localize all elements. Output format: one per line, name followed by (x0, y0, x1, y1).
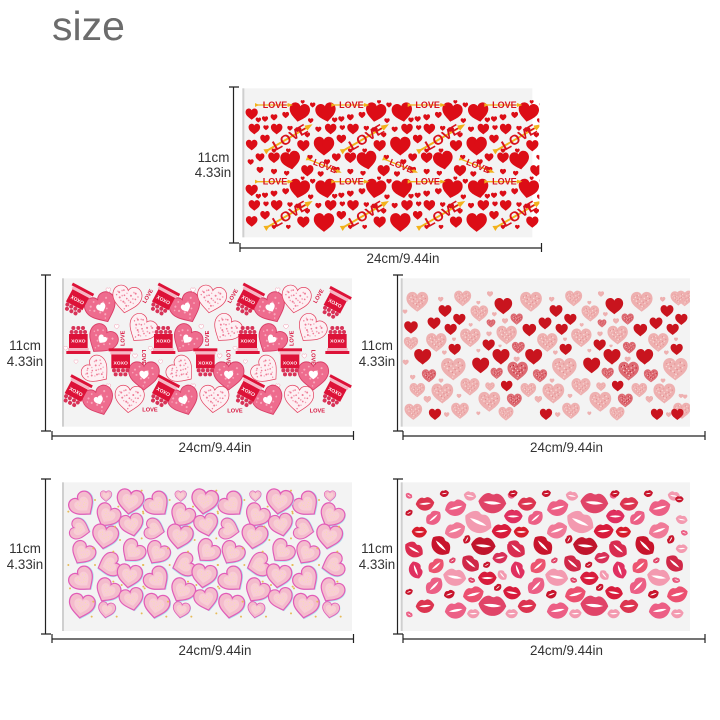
pattern sheet: LOVE (227, 409, 243, 415)
width dimension: 24cm/9.44in (179, 440, 251, 455)
height dimension (7, 479, 51, 634)
title: size (52, 3, 125, 49)
pattern sheet: LOVE (309, 350, 315, 365)
width dimension (52, 431, 354, 455)
pattern sheet: XOXO (155, 295, 171, 307)
pattern sheet: XOXO (330, 338, 345, 344)
height dimension: 4.33in (195, 165, 231, 180)
pattern sheet: LOVE (140, 350, 146, 365)
pattern sheet: XOXO (69, 295, 85, 307)
width dimension: 24cm/9.44in (530, 440, 603, 455)
pattern sheet: LOVE (205, 330, 211, 346)
pattern sheet: LOVE (269, 197, 310, 230)
pattern sheet: LOVE (313, 288, 326, 305)
pattern sheet: LOVE (465, 157, 491, 175)
pattern sheet: LOVE (492, 100, 517, 110)
panel: red hearts with LOVE (195, 87, 567, 266)
height dimension: 4.33in (359, 354, 395, 369)
pattern sheet: LOVE (388, 157, 415, 175)
pattern sheet: LOVE (422, 121, 463, 153)
height dimension (7, 275, 51, 431)
pattern sheet: XOXO (113, 360, 128, 366)
width dimension (403, 634, 705, 658)
height dimension (359, 479, 403, 634)
pattern sheet (401, 278, 693, 427)
pattern sheet: LOVE (269, 121, 310, 153)
height dimension: 4.33in (7, 557, 43, 572)
pattern sheet (62, 482, 352, 631)
height dimension: 11cm (9, 541, 41, 556)
width dimension: 24cm/9.44in (179, 643, 251, 658)
pattern sheet: LOVE (492, 177, 517, 187)
panel: donut hearts and XOXO jars (7, 275, 354, 455)
pattern sheet: LOVE (312, 157, 338, 175)
width dimension (403, 431, 705, 455)
width dimension (52, 634, 354, 658)
pattern sheet: LOVE (339, 177, 364, 187)
height dimension (359, 275, 403, 431)
height dimension (195, 87, 239, 243)
pattern sheet: LOVE (415, 177, 440, 187)
pattern sheet: XOXO (240, 338, 255, 344)
pattern sheet: LOVE (120, 330, 126, 346)
pattern sheet: XOXO (327, 386, 343, 398)
pattern sheet: XOXO (155, 386, 171, 398)
width dimension (240, 243, 542, 266)
pattern sheet (59, 278, 352, 427)
height dimension: 11cm (198, 150, 229, 165)
pattern sheet: LOVE (263, 177, 287, 187)
pattern sheet: XOXO (240, 295, 256, 307)
panel: lipstick kisses (359, 479, 705, 658)
height dimension: 11cm (361, 541, 393, 556)
pattern sheet: LOVE (225, 350, 231, 365)
width dimension: 24cm/9.44in (367, 251, 439, 266)
pattern sheet: LOVE (415, 100, 440, 110)
pattern sheet: XOXO (198, 360, 213, 366)
pattern sheet: LOVE (310, 409, 325, 415)
pattern sheet: LOVE (422, 197, 463, 230)
height dimension: 11cm (9, 338, 41, 353)
pattern sheet: LOVE (339, 100, 364, 110)
pattern sheet: LOVE (227, 288, 240, 305)
height dimension: 4.33in (359, 557, 395, 572)
pattern sheet: XOXO (283, 360, 297, 366)
panel: glitter hearts (359, 275, 705, 455)
pattern sheet: XOXO (327, 298, 343, 310)
pattern sheet: LOVE (498, 121, 539, 153)
height dimension: 4.33in (7, 354, 43, 369)
pattern sheet: LOVE (290, 330, 296, 346)
pattern sheet: LOVE (346, 197, 387, 230)
pattern sheet: LOVE (346, 121, 387, 153)
width dimension: 24cm/9.44in (530, 643, 603, 658)
pattern sheet: XOXO (240, 386, 256, 398)
height dimension: 11cm (361, 338, 393, 353)
pattern sheet (242, 88, 567, 237)
panel: pastel outlined hearts (7, 479, 354, 658)
pattern sheet: LOVE (498, 197, 539, 230)
pattern sheet: LOVE (142, 407, 158, 413)
pattern sheet: XOXO (71, 338, 86, 344)
pattern sheet: XOXO (156, 338, 171, 344)
pattern sheet: LOVE (142, 288, 155, 305)
pattern sheet: LOVE (263, 100, 287, 110)
pattern sheet: XOXO (68, 386, 84, 398)
pattern sheet (401, 482, 690, 631)
